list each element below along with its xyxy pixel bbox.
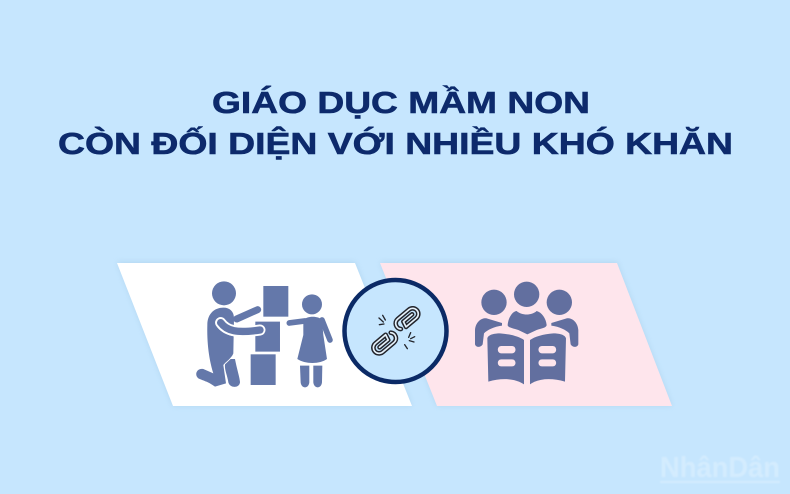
panel: right pink parallelogram with reading group: [380, 262, 672, 406]
title: [58, 85, 733, 161]
blocks: [221, 286, 288, 385]
title: GIÁO DỤC MẦM NON: [212, 85, 590, 120]
broken chain: [371, 306, 421, 356]
icon: adult and child stacking blocks: [196, 281, 330, 387]
watermark: Nhân Dân logo: NhânDân: [660, 452, 780, 484]
adult: [196, 281, 260, 387]
child: [289, 294, 330, 387]
icon: broken chain link in circle: [344, 280, 446, 382]
icon: three people reading a book: [475, 282, 578, 384]
panel: left white parallelogram with adult, child and blocks: [117, 262, 412, 406]
title: CÒN ĐỐI DIỆN VỚI NHIỀU KHÓ KHĂN: [58, 125, 733, 161]
